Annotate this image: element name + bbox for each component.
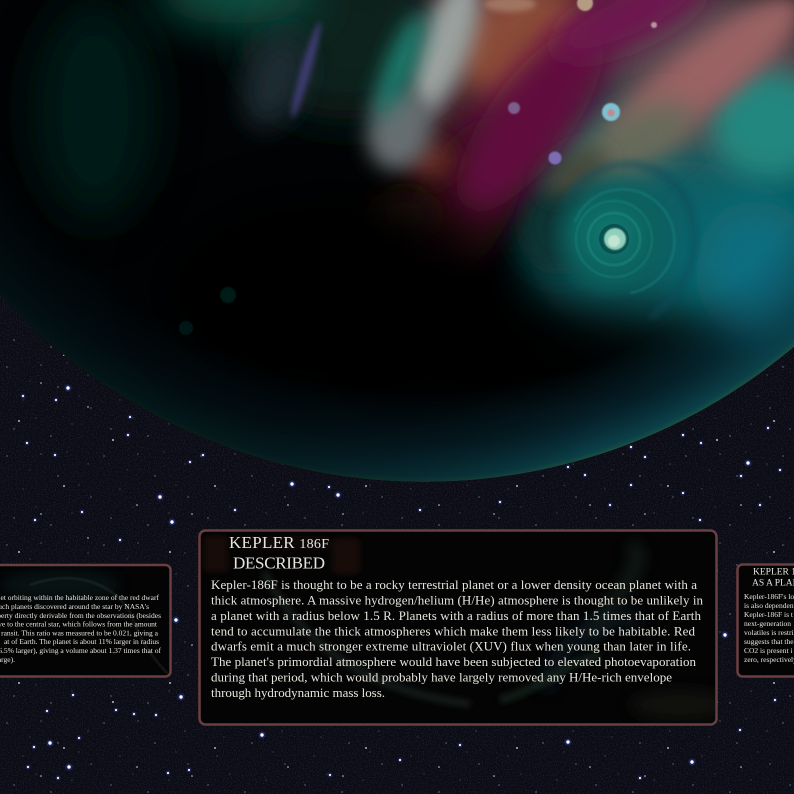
planet surface: orange and magenta bands (378, 0, 794, 262)
left card swirl (0, 571, 168, 674)
shadow overlays (368, 190, 752, 374)
title (229, 533, 329, 572)
body text: through hydrodynamic mass loss. (211, 685, 385, 700)
panel: left card (0, 565, 170, 676)
left card text: et orbiting within the habitable zone of the red dwarf (0, 593, 159, 602)
left card text: ve to the central star, which follows from the amount (0, 620, 158, 628)
cyclone swirl (546, 164, 694, 318)
rim glow (0, 244, 794, 482)
panel: Kepler 186F described (200, 530, 730, 724)
panel: right card (738, 564, 794, 676)
right card title (752, 568, 794, 588)
left card text (0, 593, 161, 664)
right card text: CO2 is present i (744, 646, 793, 655)
right card text: Kepler-186F is t (744, 610, 794, 619)
planet surface: colour underlay (235, 0, 794, 243)
body text: dwarfs emit a much stronger extreme ultraviolet (XUV) flux when young than later in life. (211, 639, 691, 654)
body text (211, 577, 704, 700)
title: KEPLER 186F (229, 533, 329, 552)
planet (0, 0, 794, 500)
body text: a planet with a radius below 1.5 R. Planets with a radius of more than 1.5 times that of Earth (211, 608, 702, 623)
right card text: next-generation (744, 619, 791, 628)
left card text: at of Earth. The planet is about 11% larger in radius (4, 637, 159, 646)
body text: Kepler-186F is thought to be a rocky terrestrial planet or a lower density ocean planet with a (211, 577, 697, 592)
title: DESCRIBED (233, 554, 325, 572)
title backdrop (204, 536, 360, 574)
right card text: suggests that the (744, 637, 794, 646)
left card text: 6.5% larger), giving a volume about 1.37 times that of (0, 646, 161, 655)
body text: thick atmosphere. A massive hydrogen/helium (H/He) atmosphere is thought to be unlikely in (211, 592, 704, 608)
left card text: ransit. This ratio was measured to be 0.021, giving a (1, 628, 159, 637)
body text: tend to accumulate the thick atmospheres which make them less likely to be habitable. Red (211, 623, 696, 638)
panel swirl texture (264, 545, 730, 721)
planet surface: dim teal on the dark side (35, 0, 325, 220)
right card text: volatiles is restri (744, 628, 794, 637)
bubbles (179, 0, 657, 335)
body text: The planet's primordial atmosphere would have been subjected to elevated photoevaporation (211, 654, 696, 669)
planet surface: teal lower right (515, 70, 794, 350)
right card text: Kepler-186F's lo (744, 592, 794, 601)
body text: during that period, which would probably have largely removed any H/He-rich envelope (211, 670, 672, 684)
right card text (744, 592, 794, 664)
planet surface: pale streak and teal (358, 0, 536, 179)
left card text: perty directly derivable from the observations (besides (0, 611, 161, 620)
left card text: uch planets discovered around the star by NASA's (0, 602, 149, 611)
